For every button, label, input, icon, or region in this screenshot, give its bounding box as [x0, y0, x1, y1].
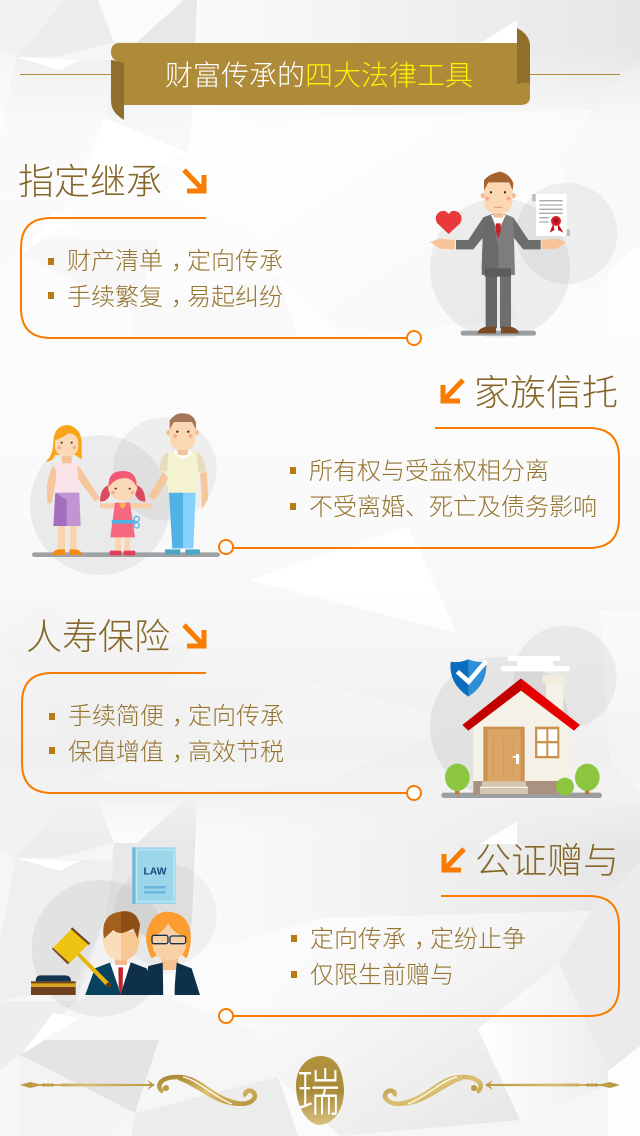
house — [473, 688, 569, 785]
seal: 瑞 — [297, 1066, 340, 1123]
box outline — [22, 673, 407, 793]
trees — [445, 764, 600, 796]
title text: 财富传承的四大法律工具 — [165, 60, 473, 91]
bullet list: 仅限生前赠与 — [310, 962, 454, 989]
box outline — [233, 428, 619, 548]
icon: lawyers, gavel and law book — [31, 847, 217, 1017]
woman — [143, 912, 200, 995]
daughter — [100, 471, 152, 555]
shield — [450, 659, 486, 697]
bullet list — [49, 703, 284, 766]
section 1: 指定继承 — [18, 161, 421, 345]
man — [85, 911, 154, 995]
clouds — [507, 656, 561, 661]
left flourish — [20, 1075, 255, 1106]
bullet list: 手续简便 ，定向传承 — [68, 703, 284, 730]
connector dot — [407, 786, 421, 800]
bullet list — [48, 248, 283, 311]
mother — [45, 425, 100, 555]
right flourish — [385, 1075, 620, 1106]
bullet list — [291, 926, 526, 989]
chimney — [546, 682, 563, 712]
connector dot — [219, 1009, 233, 1023]
title banner — [20, 28, 620, 120]
bullet list: 财产清单 ，定向传承 — [67, 248, 283, 275]
bullet list — [290, 458, 597, 521]
law book: LAW — [144, 866, 167, 877]
footer ornament — [20, 1056, 620, 1125]
bullet list: 定向传承 ，定纷止争 — [310, 926, 526, 953]
box outline — [233, 896, 619, 1016]
arrow — [443, 380, 463, 401]
heading: 人寿保险 — [26, 616, 170, 657]
section 3: 人寿保险 — [22, 616, 421, 800]
arrow — [184, 170, 204, 191]
section 2: 家族信托 — [219, 372, 619, 554]
arrow — [444, 849, 464, 870]
bullet list: 保值增值 ，高效节税 — [68, 739, 284, 766]
certificate — [532, 194, 570, 236]
law book — [132, 847, 176, 904]
bullet list: 不受离婚、死亡及债务影响 — [309, 494, 597, 521]
heading: 家族信托 — [474, 372, 618, 413]
section 4: 公证赠与 — [219, 840, 619, 1023]
arrow — [184, 625, 204, 646]
bullet list: 手续繁复 ，易起纠纷 — [67, 284, 283, 311]
icon: family of three — [30, 413, 220, 575]
connector dot — [219, 540, 233, 554]
gavel — [31, 927, 111, 995]
heart — [436, 211, 462, 234]
connector dot — [407, 331, 421, 345]
heading: 公证赠与 — [475, 840, 619, 881]
bullet list: 所有权与受益权相分离 — [309, 458, 549, 485]
icon: businessman with heart and certificate — [430, 172, 617, 338]
box outline — [21, 218, 407, 338]
father — [148, 413, 208, 555]
icon: house and shield — [430, 626, 617, 798]
heading: 指定继承 — [18, 161, 162, 202]
